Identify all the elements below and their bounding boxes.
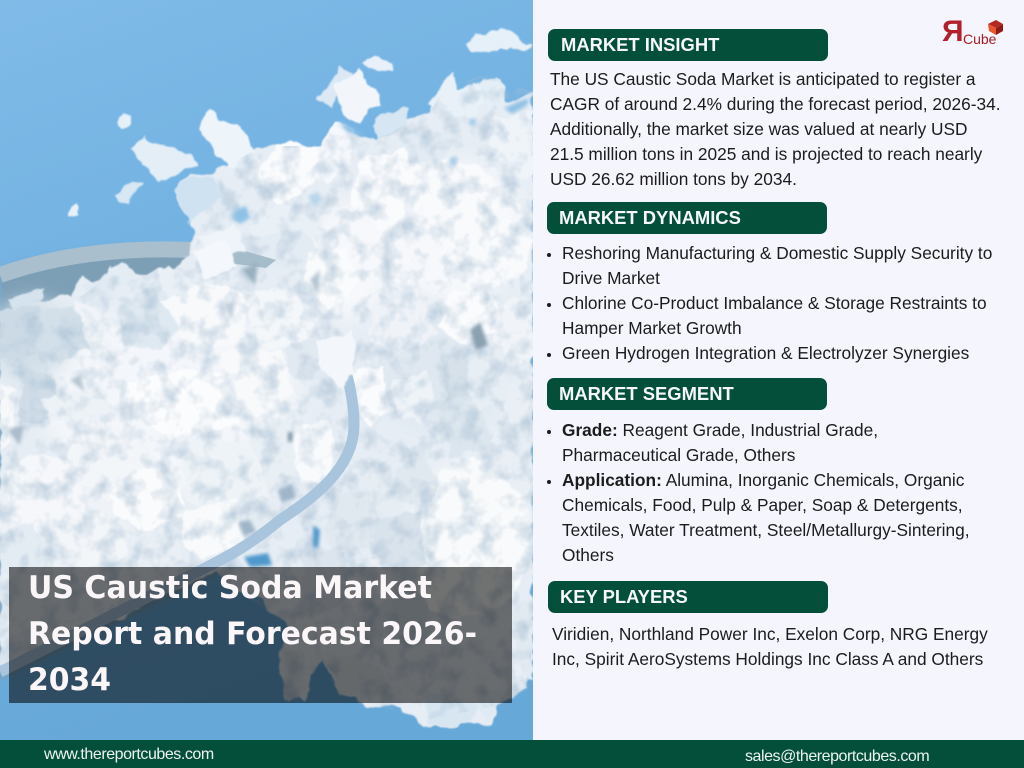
list: market segment: Others: [562, 545, 614, 565]
crevices: [8, 262, 488, 567]
footer: website: www.thereportcubes.com: [44, 746, 214, 763]
logo: RCube: Я: [942, 15, 964, 48]
list: market segment: Pharmaceutical Grade, Others: [562, 445, 795, 465]
title text: [28, 570, 477, 698]
heading: market insight: [548, 29, 828, 61]
salt flakes: [0, 26, 533, 725]
list: market segment: [547, 420, 970, 565]
logo: RCube: Cube: [963, 31, 996, 47]
text: market insight: CAGR of around 2.4% during the forecast period, 2026-34.: [550, 94, 1001, 114]
list: market segment: Application: Alumina, Inorganic Chemicals, Organic: [562, 470, 964, 490]
text: key players: [552, 624, 988, 669]
footer: email: sales@thereportcubes.com: [745, 748, 929, 765]
heading: key players: [548, 581, 828, 613]
blue gaps between flakes: [232, 98, 528, 224]
heading: market segment: MARKET SEGMENT: [559, 383, 734, 404]
title box: [9, 567, 512, 703]
heading: market segment: [547, 378, 827, 410]
list: market dynamics: Reshoring Manufacturing & Domestic Supply Security to: [562, 243, 992, 263]
logo: RCube: [942, 15, 1003, 48]
flake shadow texture: [0, 76, 533, 720]
title text: Report and Forecast 2026-: [28, 616, 477, 652]
heading: market insight: MARKET INSIGHT: [561, 34, 719, 55]
list: market dynamics: [547, 243, 992, 363]
footer bar: [0, 740, 1024, 768]
title text: US Caustic Soda Market: [28, 570, 432, 606]
heading: market dynamics: MARKET DYNAMICS: [559, 207, 741, 228]
list: market dynamics: Green Hydrogen Integration & Electrolyzer Synergies: [562, 343, 969, 363]
salt mass base: [0, 76, 533, 727]
list: market dynamics: Drive Market: [562, 268, 660, 288]
list: market segment: Textiles, Water Treatment, Steel/Metallurgy-Sintering,: [562, 520, 970, 540]
heading: key players: KEY PLAYERS: [560, 586, 688, 607]
photo: caustic soda flakes in a bowl on blue background: [0, 0, 533, 740]
text: market insight: The US Caustic Soda Market is anticipated to register a: [550, 69, 976, 89]
text: market insight: 21.5 million tons in 2025 and is projected to reach nearly: [550, 144, 982, 164]
bowl rim segments and translucent flakes over the mass: [0, 352, 354, 672]
text: market insight: Additionally, the market size was valued at nearly USD: [550, 119, 968, 139]
list: market segment: Chemicals, Food, Pulp & Paper, Soap & Detergents,: [562, 495, 963, 515]
list: market dynamics: Hamper Market Growth: [562, 318, 742, 338]
text: key players: Viridien, Northland Power Inc, Exelon Corp, NRG Energy: [552, 624, 988, 644]
title text: 2034: [28, 662, 111, 698]
text: key players: Inc, Spirit AeroSystems Holdings Inc Class A and Others: [552, 649, 983, 669]
text: market insight: USD 26.62 million tons by 2034.: [550, 169, 797, 189]
list: market segment: Grade: Reagent Grade, Industrial Grade,: [562, 420, 878, 440]
text: market insight: [550, 69, 1001, 189]
heading: market dynamics: [547, 202, 827, 234]
list: market dynamics: Chlorine Co-Product Imbalance & Storage Restraints to: [562, 293, 987, 313]
